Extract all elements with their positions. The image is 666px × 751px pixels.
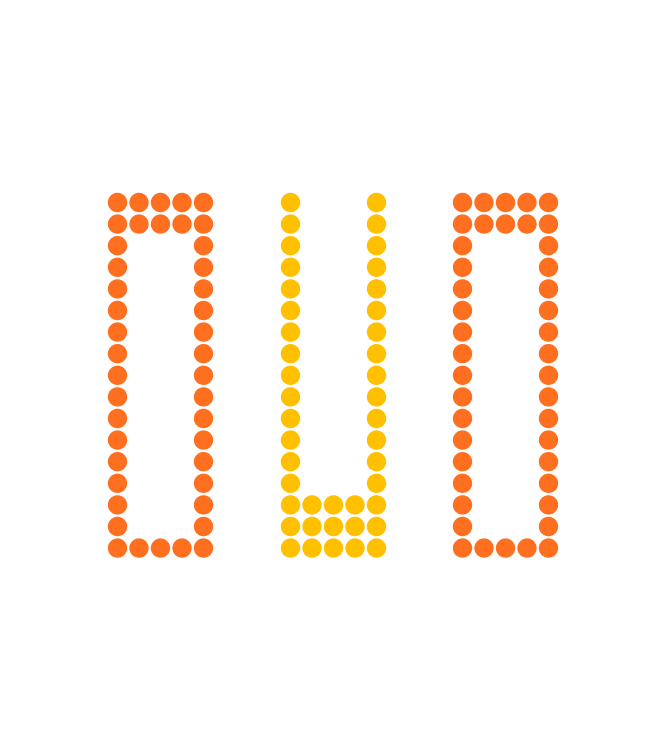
left orange dot letter <box>108 193 213 558</box>
right orange dot letter <box>453 193 558 558</box>
middle yellow dot letter <box>281 193 386 558</box>
